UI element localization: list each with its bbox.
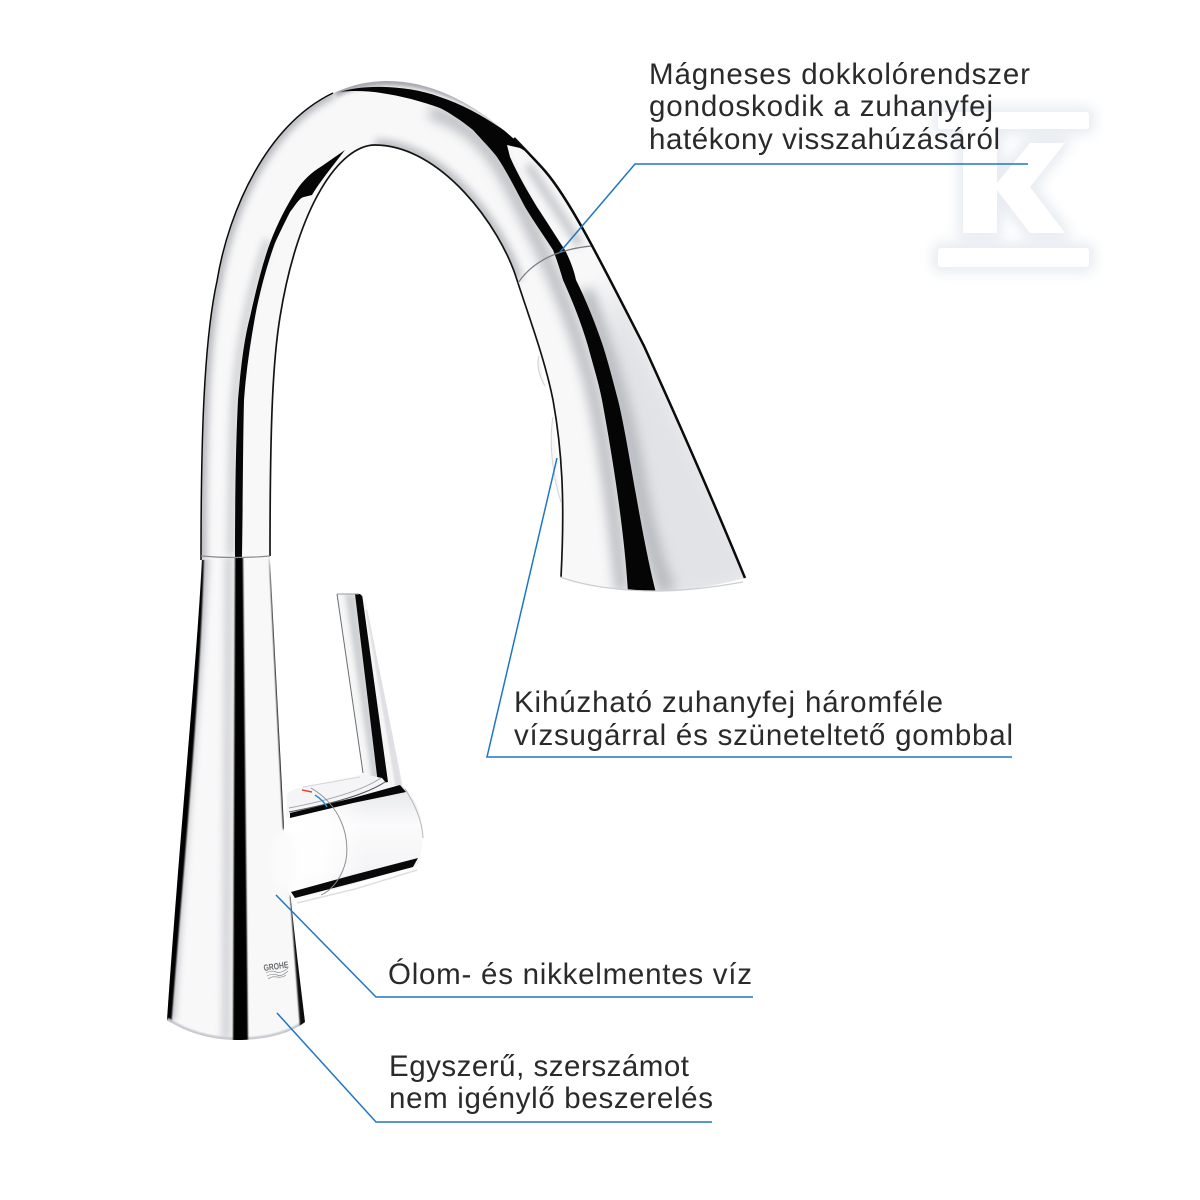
watermark: K logo bbox=[938, 112, 1089, 267]
callout: magnetic docking: hatékony visszahúzásáról bbox=[649, 123, 1000, 156]
callout: tool-free installation bbox=[277, 1013, 713, 1122]
callout: lead and nickel free bbox=[276, 895, 753, 997]
GROHE logo bbox=[263, 960, 289, 979]
dark reflection spout bbox=[340, 87, 656, 593]
callout: tool-free installation: nem igénylő beszerelés bbox=[389, 1082, 713, 1115]
spout outlines bbox=[201, 93, 333, 560]
callout: pull-out shower head bbox=[487, 458, 1013, 757]
faucet bbox=[165, 81, 760, 1042]
callout: pull-out shower head: Kihúzható zuhanyfej háromféle bbox=[514, 686, 943, 719]
spout shading bbox=[608, 292, 744, 590]
callout: magnetic docking: gondoskodik a zuhanyfej bbox=[649, 90, 993, 123]
dark reflection left bbox=[235, 150, 345, 557]
callout: tool-free installation: Egyszerű, szerszámot bbox=[389, 1050, 689, 1083]
callout: pull-out shower head: vízsugárral és szüneteltető gombbal bbox=[514, 719, 1013, 752]
callout: lead and nickel free: Ólom- és nikkelmentes víz bbox=[388, 958, 752, 991]
seams bbox=[518, 246, 591, 283]
callout: magnetic docking bbox=[560, 58, 1030, 252]
faucet arched spout bbox=[201, 81, 760, 600]
faucet lever handle bbox=[286, 594, 403, 818]
callout: magnetic docking: Mágneses dokkolórendszer bbox=[649, 58, 1030, 91]
GROHE logo: GROHE bbox=[263, 960, 289, 973]
faucet lower stem bbox=[165, 556, 307, 1042]
faucet mixer body bbox=[272, 785, 423, 903]
shower head buttons bbox=[538, 356, 545, 386]
lever base bbox=[286, 774, 392, 818]
